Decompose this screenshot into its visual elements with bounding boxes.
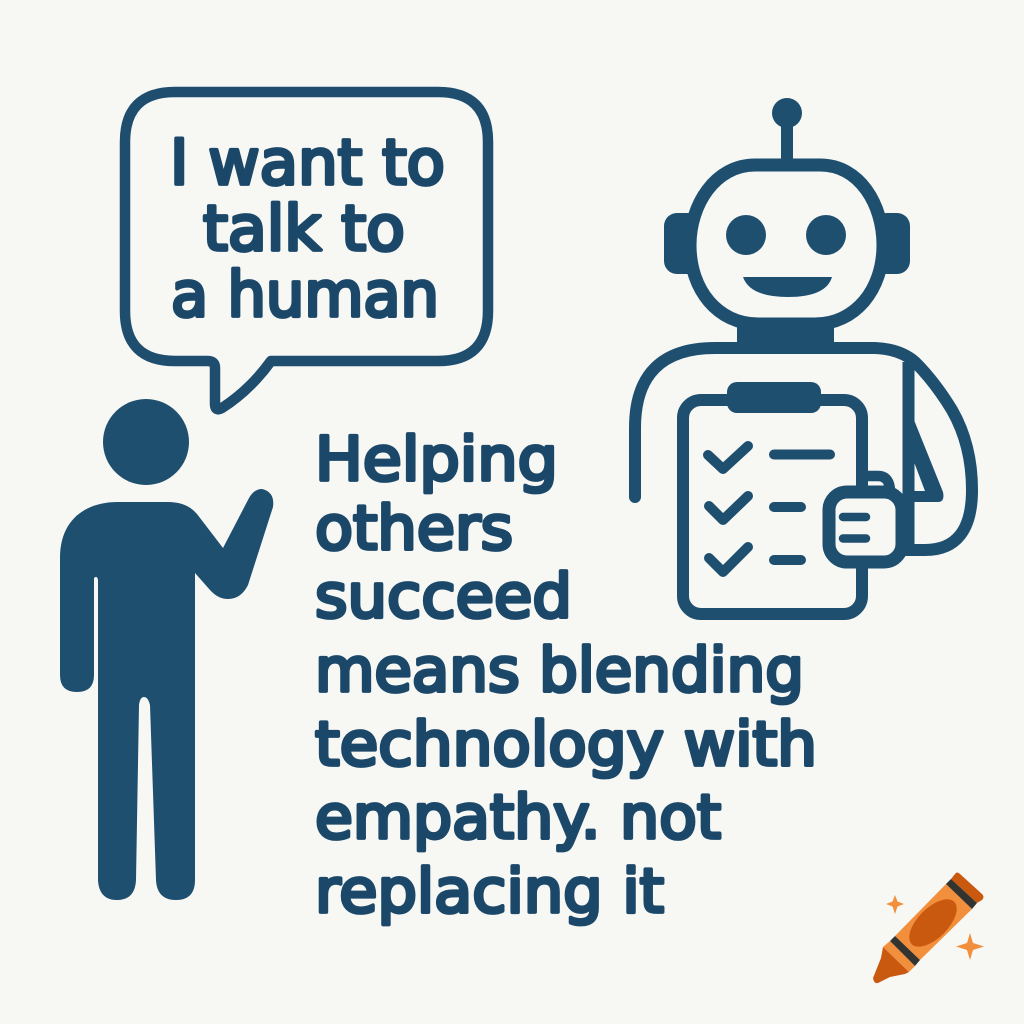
speech text: a human xyxy=(171,258,439,331)
crayon cap and tip xyxy=(873,872,984,983)
message text xyxy=(315,424,817,927)
clipboard xyxy=(683,382,862,614)
crayon bands xyxy=(890,879,977,966)
speech bubble xyxy=(125,92,488,409)
message text: means blending xyxy=(315,635,804,706)
message text: technology with xyxy=(315,709,817,780)
message text: Helping xyxy=(315,424,558,495)
message text: empathy. not xyxy=(315,782,721,853)
robot face xyxy=(726,215,846,297)
icon: crayon xyxy=(873,872,984,983)
speech text: I want to xyxy=(170,126,445,199)
message text: replacing it xyxy=(315,856,664,927)
robot antenna xyxy=(772,98,802,165)
speech text: talk to xyxy=(203,192,405,265)
icon: person xyxy=(60,399,273,900)
speech text xyxy=(170,126,445,331)
robot hand xyxy=(829,476,902,562)
message text: others xyxy=(315,493,513,564)
checklist xyxy=(708,446,830,572)
robot neck xyxy=(737,318,834,346)
message text: succeed xyxy=(315,561,572,632)
sparkles xyxy=(886,895,984,960)
crayon body xyxy=(895,884,972,960)
robot body and arm xyxy=(635,348,972,550)
robot ears xyxy=(664,213,910,274)
robot head xyxy=(690,165,883,324)
icon: robot xyxy=(635,98,972,614)
